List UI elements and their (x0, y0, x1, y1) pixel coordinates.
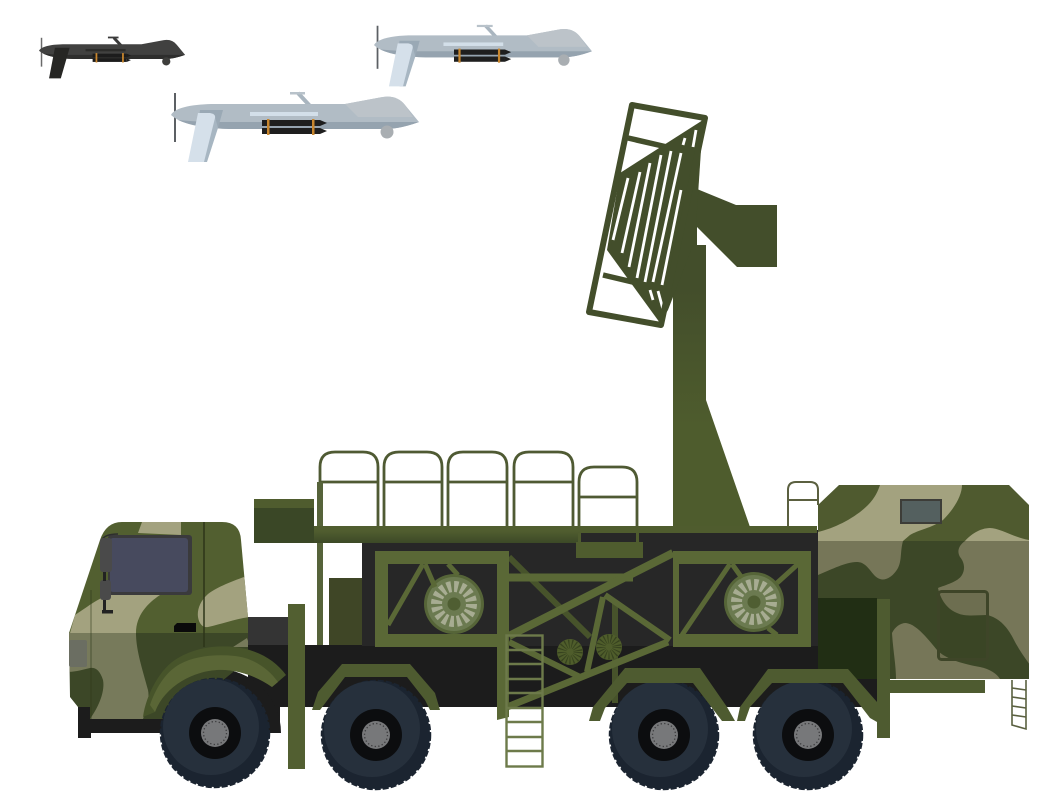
grey block (248, 617, 288, 645)
radar grid panel (589, 105, 705, 325)
access ladder (506, 636, 543, 766)
rear camouflage cabin (815, 485, 1030, 729)
drone: small dark (39, 37, 185, 78)
bumper and frame (78, 671, 281, 738)
headlight (69, 640, 87, 667)
drone: large grey (171, 92, 419, 162)
small rear railing (788, 482, 818, 527)
left and right braces (388, 564, 798, 635)
radar arm (697, 189, 777, 267)
right frame (673, 551, 811, 647)
wheel 2 (322, 681, 430, 789)
upper dark body (362, 530, 818, 646)
rear ladder (1012, 680, 1026, 729)
front cab (69, 522, 281, 738)
small fans (557, 634, 622, 665)
cab shell (69, 522, 248, 719)
mast (673, 130, 750, 527)
vertical rail (317, 482, 323, 645)
cabin hatch (938, 592, 988, 660)
wheels (161, 679, 862, 789)
central truss (507, 553, 673, 707)
dark back struts (509, 557, 615, 703)
truss leg (497, 551, 509, 720)
mirror (100, 534, 118, 614)
side box (329, 578, 362, 645)
black chassis (248, 645, 888, 707)
radar mast and antenna (589, 105, 777, 527)
cabin window (900, 499, 942, 524)
arch 3 (589, 668, 735, 721)
door handle (174, 623, 196, 632)
rear chassis stub (248, 645, 280, 733)
front post (288, 604, 305, 769)
right fan (724, 572, 784, 632)
deck (314, 526, 817, 558)
left fan (424, 574, 484, 634)
fenders and arches (143, 599, 890, 769)
black under door (857, 680, 877, 707)
lower sill (890, 680, 985, 693)
arch 4 (737, 669, 877, 722)
front fender (143, 646, 286, 717)
truck chassis and body (248, 482, 888, 733)
drone: top right grey (374, 25, 592, 86)
wheel 1 (161, 679, 269, 787)
cab panel lines (91, 522, 204, 719)
arch 2 (312, 664, 440, 710)
truss structure with fans (375, 551, 811, 720)
deck railings (320, 452, 818, 527)
wheel 4 (754, 681, 862, 789)
cab window (108, 535, 192, 595)
wheel 3 (610, 681, 718, 789)
left frame (375, 551, 509, 647)
equipment box (254, 499, 314, 543)
dark rear door (815, 598, 877, 680)
rear post (877, 599, 890, 738)
